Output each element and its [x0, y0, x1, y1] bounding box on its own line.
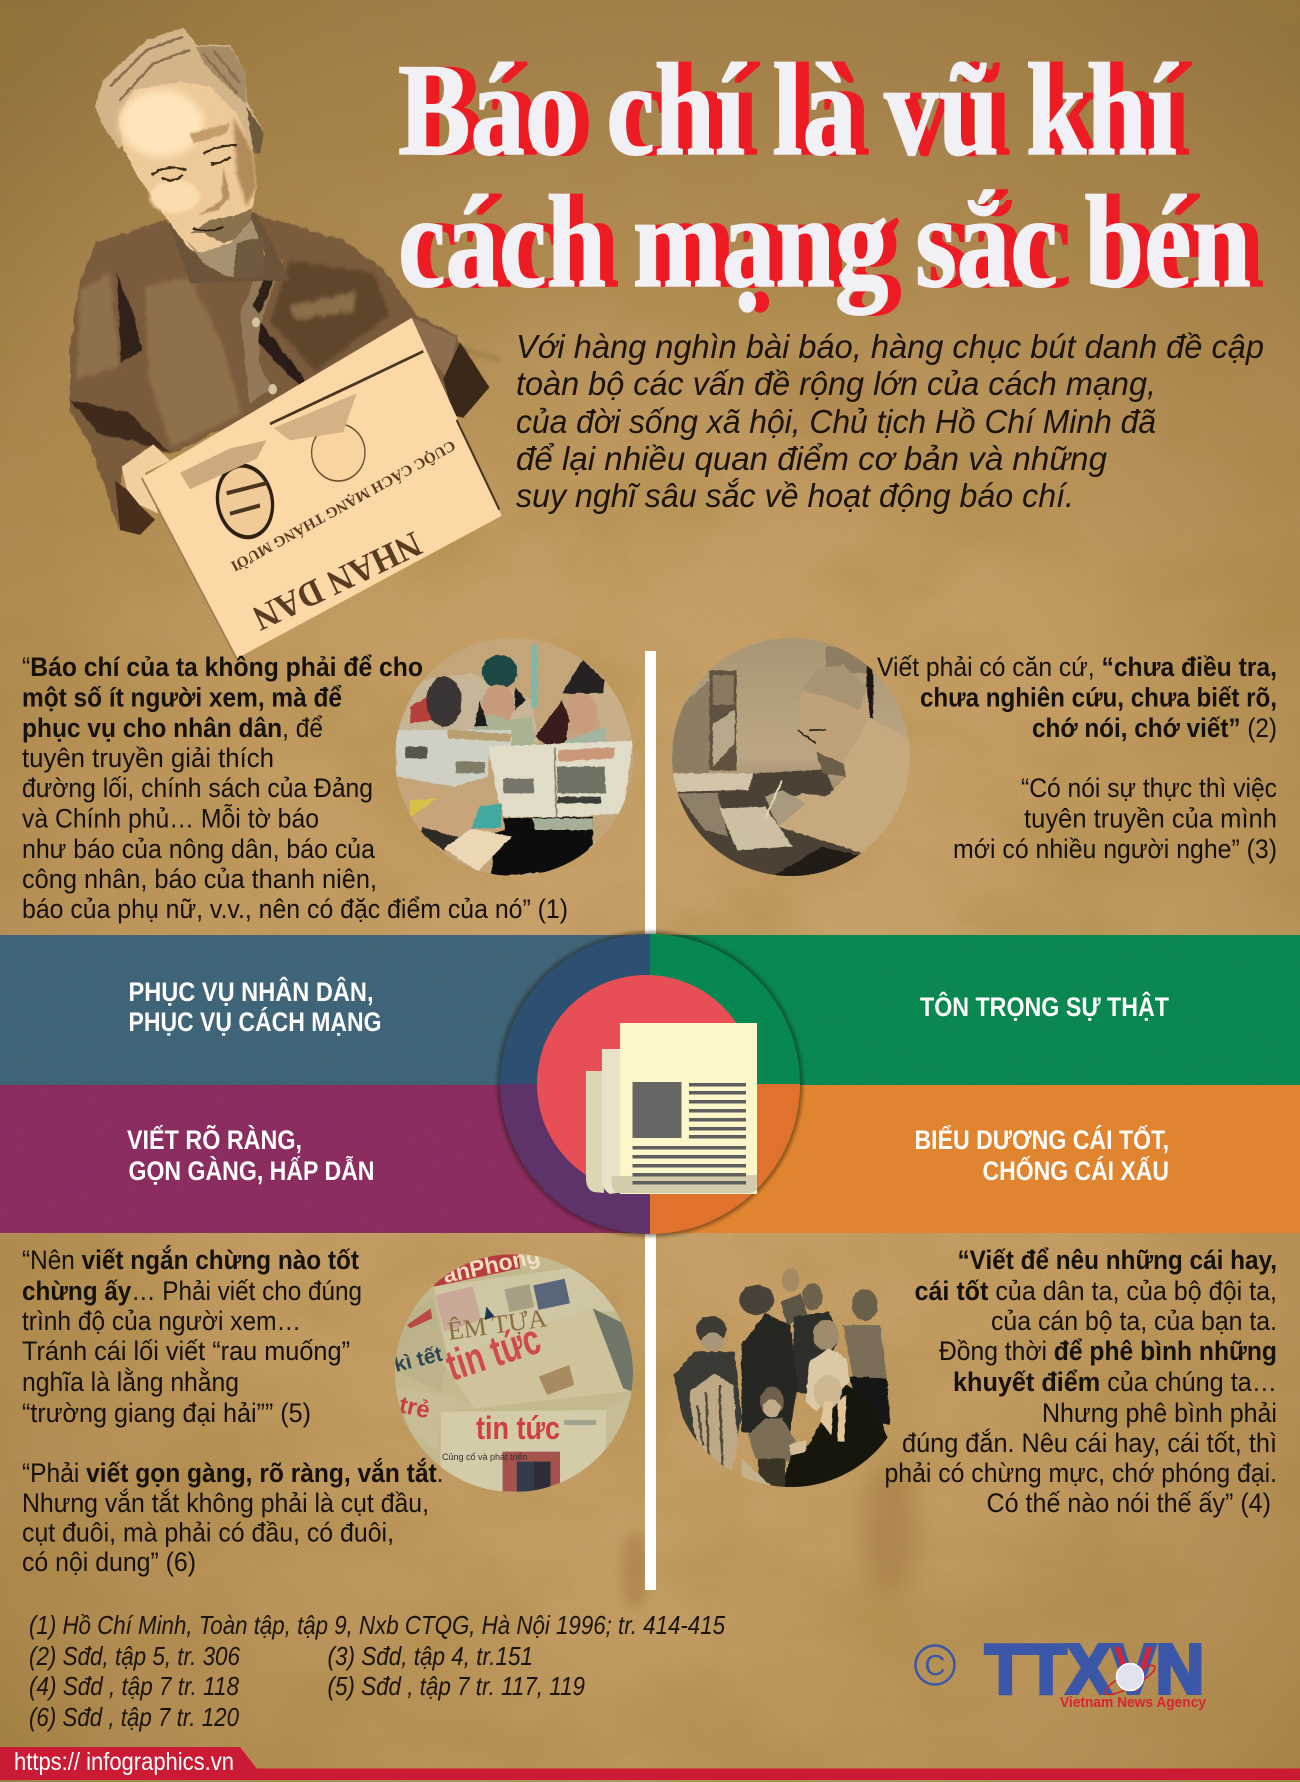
panel: quote 2 text: [877, 652, 1277, 864]
beard: [187, 220, 265, 277]
panel: quote 2 photo: [672, 638, 917, 877]
left hand: [122, 444, 170, 514]
references: (5) Sđd , tập 7 tr. 117, 119: [328, 1671, 585, 1701]
globe: [1102, 1661, 1158, 1699]
right hand: [412, 318, 457, 379]
intro text: Với hàng nghìn bài báo, hàng chục bút danh đề cập: [516, 328, 1264, 365]
panel: quote 1 text: tuyên truyền giải thích: [22, 743, 274, 773]
background figures: [781, 1268, 800, 1292]
panel: quote 5-6 text: “trường giang đại hải”” (5): [22, 1398, 311, 1428]
panel: quote 4 photo: [674, 1268, 890, 1488]
portrait: Ho Chi Minh reading newspaper: [70, 27, 502, 659]
colour bands with principles: [0, 935, 1300, 1233]
panel: quote 5-6 text: “Phải viết gọn gàng, rõ ràng, vắn tắt.: [22, 1457, 444, 1488]
side headline red: trẻ: [397, 1391, 432, 1424]
face: [118, 82, 257, 257]
panel: quote 1 text: [22, 652, 568, 924]
panel: quote 1 text: và Chính phủ… Mỗi tờ báo: [22, 802, 319, 834]
side headlines: kì tết: [392, 1343, 445, 1377]
cheek shade: [233, 117, 257, 207]
left woman: [696, 1316, 726, 1344]
intro text: để lại nhiều quan điểm cơ bản và những: [516, 440, 1108, 477]
references: (4) Sđd , tập 7 tr. 118: [29, 1671, 239, 1701]
footer bar: [0, 1747, 1300, 1780]
shirt buttons: [252, 317, 260, 327]
forehead highlight: [120, 90, 203, 157]
left cuff: [115, 481, 155, 535]
references: (1) Hồ Chí Minh, Toàn tập, tập 9, Nxb CTQG, Hà Nội 1996; tr. 414-415: [29, 1610, 725, 1640]
eyes: [152, 145, 237, 180]
copyright mark: [916, 1646, 954, 1684]
lower red masthead: tin tức: [476, 1410, 560, 1446]
panel: quote 5-6 text: Nhưng vắn tắt không phải là cụt đầu,: [22, 1487, 429, 1518]
panel: quote 4 text: Đồng thời để phê bình những: [939, 1336, 1277, 1366]
TTXVN logo: [916, 1630, 1206, 1711]
standing woman: [739, 1285, 774, 1315]
intro text: suy nghĩ sâu sắc về hoạt động báo chí.: [516, 477, 1074, 514]
masthead text: ÊM TỰA: [446, 1303, 549, 1346]
panel: quote 2 text: chớ nói, chớ viết” (2): [1032, 713, 1277, 743]
panel: quote 5-6 text: [22, 1244, 444, 1577]
panel: quote 4 text: phải có chừng mực, chớ phóng đại.: [884, 1458, 1277, 1488]
panel: quote 4 text: [884, 1245, 1277, 1518]
newspaper headline: NHAN DAN: [247, 524, 428, 639]
footer url: https:// infographics.vn: [14, 1748, 234, 1776]
hair: [95, 27, 264, 153]
band: respect truth: [650, 935, 1300, 1085]
footer tab: [0, 1747, 257, 1769]
panel: quote 4 text: khuyết điểm của chúng ta…: [953, 1367, 1277, 1397]
panel: quote 2 text: mới có nhiều người nghe” (3): [953, 834, 1277, 864]
panel: quote 4 text: Nhưng phê bình phải: [1042, 1398, 1277, 1428]
intro text: toàn bộ các vấn đề rộng lớn của cách mạng,: [516, 365, 1156, 402]
intro text: của đời sống xã hội, Chủ tịch Hồ Chí Minh đã: [516, 403, 1156, 440]
panel: quote 4 text: của cán bộ ta, của bạn ta.: [991, 1306, 1277, 1336]
panel: quote 2 text: “Có nói sự thực thì việc: [1021, 773, 1277, 803]
band: praise good: CHỐNG CÁI XẤU: [982, 1154, 1169, 1186]
panel: quote 2 text: tuyên truyền của mình: [1024, 804, 1277, 834]
front child: [760, 1387, 784, 1417]
wordmark: TTXVN: [985, 1630, 1204, 1708]
panel: quote 4 text: cái tốt của dân ta, của bộ đội ta,: [914, 1276, 1277, 1306]
center vertical rule: [645, 651, 656, 1590]
head: [95, 27, 290, 283]
tagline: Vietnam News Agency: [1060, 1695, 1206, 1711]
panel: quote 1 text: một số ít người xem, mà để: [22, 682, 342, 712]
red disc: [537, 975, 755, 1193]
copyright mark: C: [925, 1650, 945, 1682]
panel: quote 5-6 text: Tránh cái lối viết “rau muống”: [22, 1336, 350, 1366]
panel: quote 5-6 text: cụt đuôi, mà phải có đầu, có đuôi,: [22, 1518, 394, 1548]
rice sheaf: [689, 1374, 738, 1471]
references: (2) Sđd, tập 5, tr. 306: [29, 1641, 240, 1671]
panel: quote 5-6 text: trình độ của người xem…: [22, 1306, 301, 1336]
shirt: [70, 215, 489, 530]
panel: quote 1 text: “Báo chí của ta không phải để cho: [22, 652, 423, 682]
panel: quote 4 text: Có thế nào nói thế ấy” (4): [986, 1488, 1271, 1518]
large red masthead: tin tức: [440, 1315, 546, 1391]
band: clear writing: GỌN GÀNG, HẤP DẪN: [128, 1155, 374, 1186]
seated man: [782, 1385, 890, 1488]
references: (6) Sđd , tập 7 tr. 120: [29, 1702, 239, 1732]
caption: Củng cố và phát triển: [442, 1452, 528, 1462]
panel: quote 1 text: công nhân, báo của thanh niên,: [22, 864, 377, 894]
band texture: [0, 935, 1300, 1233]
band: praise good: [650, 1085, 1300, 1233]
panel: quote 5-6 text: có nội dung” (6): [22, 1547, 196, 1577]
small newspaper logos: anPhong: [441, 1242, 542, 1288]
icon: newspaper: [586, 1023, 757, 1194]
band: respect truth: TÔN TRỌNG SỰ THẬT: [920, 991, 1169, 1022]
newspaper pictures: [207, 453, 283, 550]
panel: quote 2 text: Viết phải có căn cứ, “chưa điều tra,: [877, 652, 1277, 682]
panel: quote 1 text: báo của phụ nữ, v.v., nên có đặc điểm của nó” (1): [22, 894, 568, 924]
intro text: [516, 328, 1264, 514]
references: [29, 1610, 725, 1732]
band: praise good: BIỂU DƯƠNG CÁI TỐT,: [914, 1123, 1169, 1155]
panel: quote 5-6 text: “Nên viết ngắn chừng nào tốt: [22, 1244, 359, 1275]
band: serve the people: PHỤC VỤ NHÂN DÂN,: [128, 976, 374, 1007]
right cuff: [443, 342, 489, 418]
neck shadow: [167, 213, 290, 283]
panel: quote 1 photo: [395, 638, 633, 876]
child on right: [813, 1320, 839, 1350]
central circle emblem: [500, 934, 800, 1234]
panel: quote 5-6 photo: [395, 1254, 633, 1492]
nose: [198, 167, 230, 215]
panel: quote 1 text: như báo của nông dân, báo của: [22, 834, 376, 864]
newspaper sheet: [142, 318, 502, 659]
panel: quote 4 text: đúng đắn. Nêu cái hay, cái tốt, thì: [902, 1427, 1277, 1458]
newspaper fold: [270, 351, 423, 424]
band: clear writing: VIẾT RÕ RÀNG,: [127, 1124, 302, 1155]
moustache: [190, 208, 252, 243]
band: serve the people: [0, 935, 650, 1085]
title: [398, 36, 1264, 315]
panel: quote 1 text: đường lối, chính sách của Đảng: [22, 773, 373, 803]
references: (3) Sđd, tập 4, tr.151: [328, 1641, 533, 1671]
newspaper subheadline: CUỘC CÁCH MẠNG THÁNG MƯỜI: [228, 437, 458, 575]
panel: quote 5-6 text: nghĩa là lằng nhằng: [22, 1366, 239, 1397]
panel: quote 1 text: phục vụ cho nhân dân, để: [22, 713, 323, 743]
band: clear writing: [0, 1085, 650, 1233]
band: serve the people: PHỤC VỤ CÁCH MẠNG: [128, 1006, 382, 1037]
panel: quote 5-6 text: chừng ấy… Phải viết cho đúng: [22, 1276, 362, 1306]
